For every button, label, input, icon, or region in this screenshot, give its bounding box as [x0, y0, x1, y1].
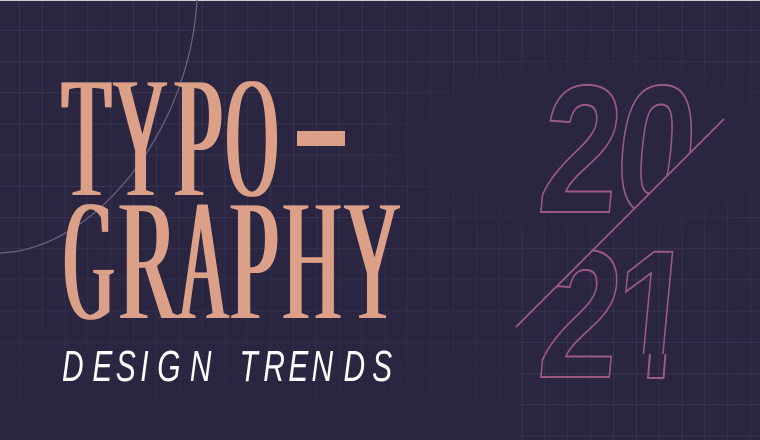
year: 21 — [540, 250, 674, 379]
subtitle: DESIGN TRENDS — [62, 341, 392, 390]
title: GRAPHY — [64, 163, 400, 357]
title: TYPO-: P — [174, 40, 223, 234]
title: TYPO-: Y — [114, 40, 167, 234]
title: GRAPHY: P — [230, 163, 279, 357]
title: GRAPHY: H — [283, 163, 341, 357]
title: TYPO- — [62, 40, 345, 234]
year: 20: 20 — [532, 47, 706, 251]
title: GRAPHY: A — [178, 163, 228, 357]
title: GRAPHY: R — [119, 163, 177, 357]
decorative arc — [0, 0, 197, 253]
year: 21: 2 — [532, 212, 631, 416]
title: TYPO-: T — [62, 40, 111, 234]
year: 21: 1 — [604, 212, 703, 416]
title: TYPO-: O — [226, 40, 278, 234]
cover infographic: Y — [345, 163, 400, 357]
diagonal slash — [516, 119, 724, 327]
title: GRAPHY: G — [64, 163, 114, 357]
